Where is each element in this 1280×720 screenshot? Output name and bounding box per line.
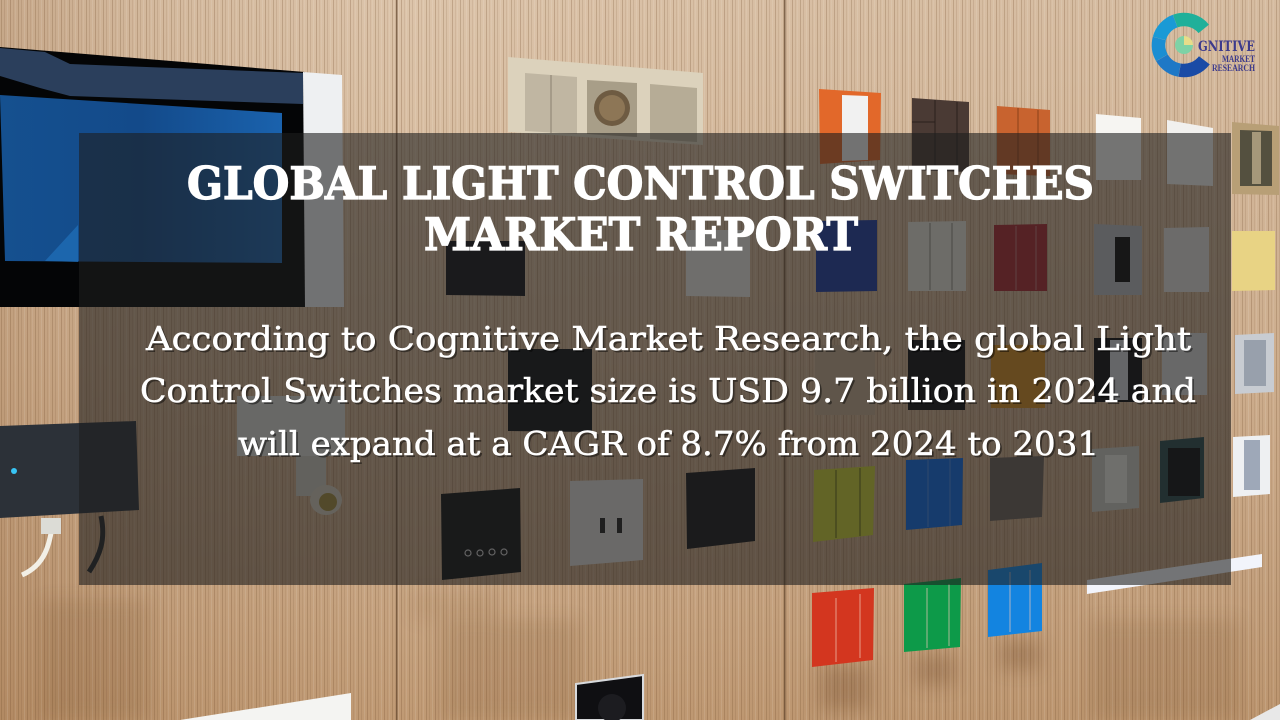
switch row 3 — [508, 333, 1274, 432]
description text: According to Cognitive Market Research, the global Light — [145, 319, 1191, 358]
dark translucent overlay panel — [79, 133, 1231, 585]
light strip — [1087, 554, 1262, 594]
wall shadows — [40, 590, 1240, 720]
switch row 2 — [446, 220, 1275, 297]
description text: Control Switches market size is USD 9.7 billion in 2024 and — [142, 373, 1198, 412]
description text: will expand at a CAGR of 8.7% from 2024 to 2031 — [238, 424, 1099, 463]
description text: According to Cognitive Market Research, the global Light — [147, 321, 1193, 360]
logo: Cognitive Market Research: GNITIVE — [1198, 39, 1255, 55]
light strip, bottom — [180, 693, 351, 720]
white plate and brass pipe fitting — [237, 396, 345, 515]
description text: will expand at a CAGR of 8.7% from 2024 to 2031 — [240, 426, 1101, 465]
title: GLOBAL LIGHT CONTROL SWITCHES — [187, 157, 1094, 210]
switch row 1 — [819, 89, 1279, 195]
bottom row: touch panel, USB plate and black switch — [441, 468, 755, 720]
wall-mounted display — [0, 47, 344, 307]
logo: Cognitive Market Research: MARKET — [1222, 54, 1255, 64]
title — [187, 157, 1094, 261]
description text: Control Switches market size is USD 9.7 billion in 2024 and — [140, 371, 1196, 410]
router box with cables — [0, 421, 139, 575]
switch row 5: red, green and blue — [812, 563, 1042, 667]
switch row 4 — [813, 435, 1270, 542]
logo: Cognitive Market Research — [1148, 9, 1255, 81]
title: MARKET REPORT — [424, 208, 858, 261]
logo: Cognitive Market Research: RESEARCH — [1212, 63, 1255, 73]
top triple switch plate — [508, 57, 703, 145]
description text — [140, 319, 1198, 465]
